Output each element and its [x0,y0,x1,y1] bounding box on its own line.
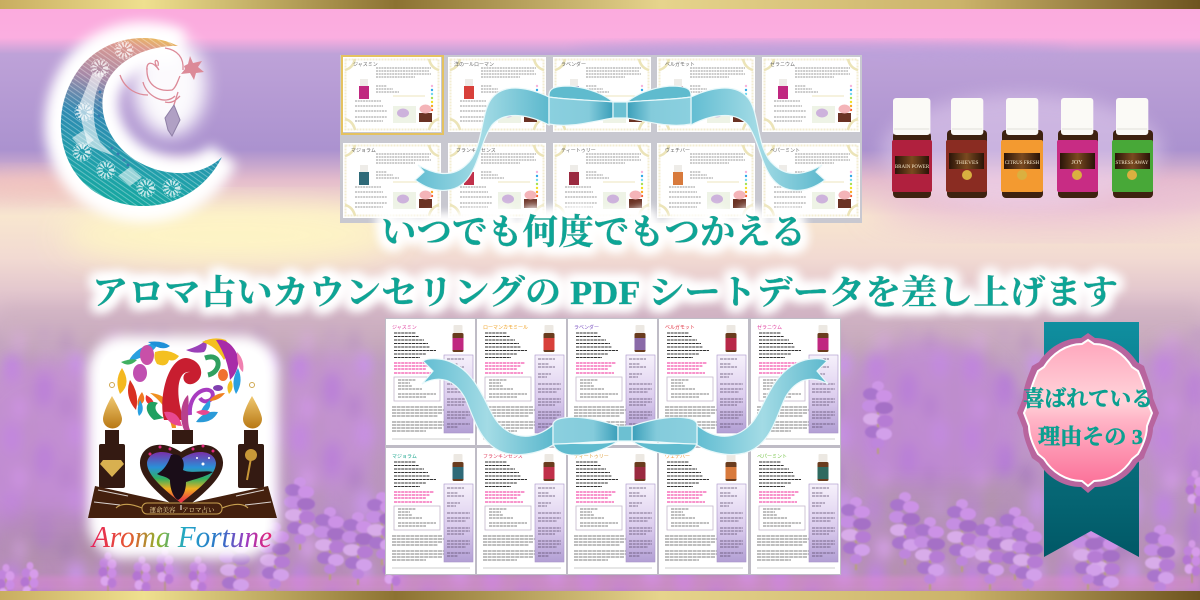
top slide: marjoram [343,143,441,218]
pdf sheet: peppermint [751,448,840,574]
pdf sheet: lavender: ラベンダー [574,324,599,331]
bottle: Citrus Fresh [1001,98,1043,198]
top slide: lavender: ラベンダー [561,61,586,68]
top slide: tea tree: ティートゥリー [561,148,596,154]
bottle: Brain Power: BRAIN POWER [895,165,930,170]
pdf sheet: tea tree [568,448,657,574]
Aroma Fortune logo [88,336,278,558]
crescent moon logo [50,35,230,215]
logo: right bottle [238,430,264,488]
badge: teal banner [1044,322,1139,557]
logo: colourful swirl heart [117,338,243,430]
top slide: marjoram: マジョラム [351,148,376,154]
logo: right oil drop [243,382,262,428]
bottle: Stress Away: STRESS AWAY [1116,161,1149,166]
essential oil bottles row [882,94,1162,206]
top slide: geranium: ゼラニウム [770,61,795,68]
bottle: Joy [1057,98,1098,198]
top preview: gallery of ten aroma slides [340,55,862,223]
pdf sheet: frankincense [477,448,566,574]
gold frame band: top [0,0,1200,9]
top slide: geranium [762,57,860,132]
pdf sheet: tea tree: ティートゥリー [574,454,609,460]
pdf sheet: marjoram: マジョラム [392,454,417,460]
bottom preview: ten PDF counselling sheets [385,318,841,575]
top slide: peppermint [762,143,860,218]
top slide: jasmine (selected) [342,56,443,134]
pdf sheet: vetiver [659,448,748,574]
top slide: roman chamomile [448,57,546,132]
badge: label line 2: 理由その 3 [1038,425,1143,449]
logo: left bottle [99,430,125,488]
gold frame band: bottom [0,591,1200,600]
badge: scalloped medallion [1017,333,1159,493]
pdf sheet: frankincense: フランキンセンス [483,454,523,460]
pdf sheet: peppermint: ペパーミント [757,454,787,460]
bottle: Brain Power [892,98,932,198]
ribbon badge: reason 3 [1017,322,1159,557]
pdf sheet: geranium: ゼラニウム [757,324,782,331]
bottle: Stress Away [1112,98,1153,198]
heading line 1: いつでも何度でもつかえる [381,213,806,252]
pdf sheet: bergamot [659,319,748,445]
top slide: lavender [553,57,651,132]
top slide: frankincense [448,143,546,218]
top slide: jasmine (selected): ジャスミン [353,62,378,68]
logo: wordmark: Aroma Fortune [90,519,272,554]
heading line 2: アロマ占いカウンセリングの PDF シートデータを差し上げます [92,274,1118,312]
blue ribbon bow over slides [415,86,825,190]
top slide: peppermint: ペパーミント [770,148,800,154]
top slide: vetiver [657,143,755,218]
top slide: bergamot [657,57,755,132]
bottle: Citrus Fresh: CITRUS FRESH [1005,161,1040,166]
badge: label line 1: 喜ばれている [1023,387,1153,411]
pdf sheet: marjoram [386,448,475,574]
pdf sheet: jasmine [386,319,475,445]
logo: left oil drop [103,382,122,428]
pdf sheet: roman chamomile [477,319,566,445]
top slide: frankincense: フランキンセンス [456,148,496,154]
logo: open book: 運命美容 アロマ占い [150,505,214,514]
pdf sheet: lavender [568,319,657,445]
bottle: Thieves: THIEVES [956,160,978,166]
pdf sheet: bergamot: ベルガモット [665,324,695,331]
logo: heart bottle with silhouette [140,430,223,512]
blue ribbon bow over sheets [422,359,828,455]
top slide: vetiver: ヴェチバー [665,147,690,154]
logo: open book [88,486,277,518]
bottle: Thieves [946,98,987,198]
pdf sheet: geranium [751,319,840,445]
top slide: bergamot: ベルガモット [665,61,695,68]
top slide: tea tree [553,143,651,218]
bottle: Joy: JOY [1071,160,1083,166]
pdf sheet: jasmine: ジャスミン [392,325,417,331]
top slide: roman chamomile: 洋のールローマン [454,61,494,68]
pdf sheet: vetiver: ヴェチバー [665,453,690,460]
pdf sheet: roman chamomile: ローマンカモミール [483,325,528,331]
